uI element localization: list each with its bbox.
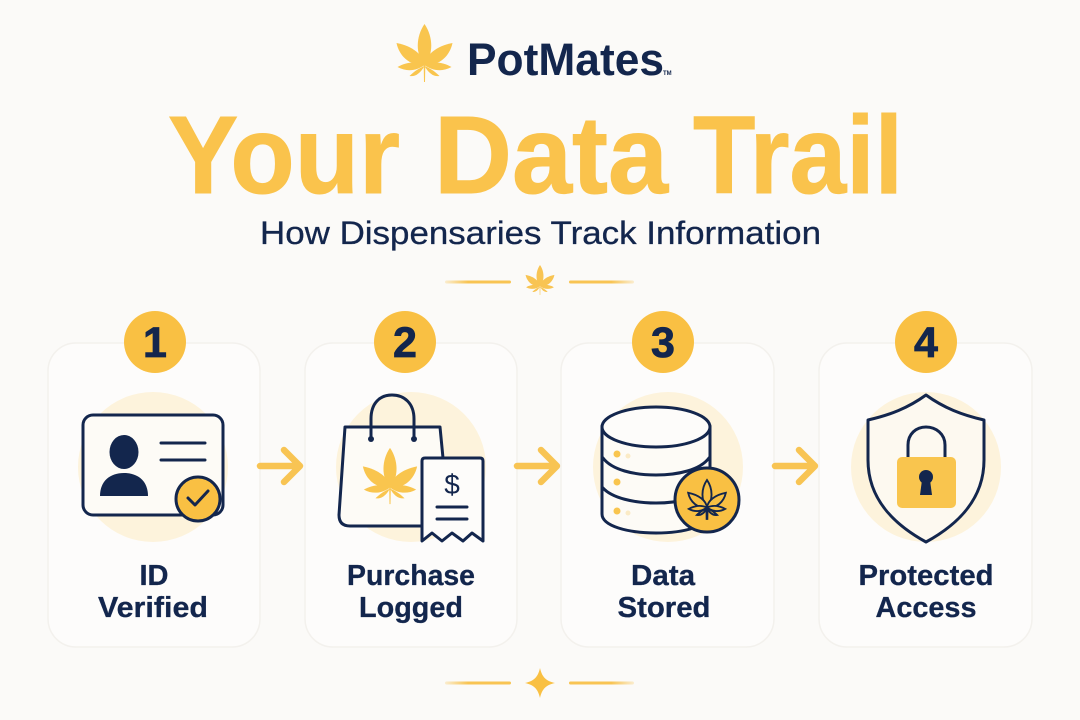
icon: shield and padlock: [851, 392, 1001, 542]
trademark: TM: [663, 71, 672, 77]
panel: step 2 Purchase Logged: [305, 311, 517, 647]
bottom divider: [445, 668, 634, 698]
label: ID: [140, 560, 168, 592]
step number 3: [632, 311, 694, 373]
title: Data: [434, 94, 669, 217]
icon: bag leaf: [363, 448, 417, 504]
arrow 1 to 2: [260, 450, 300, 482]
icon: logo leaf: [396, 24, 452, 82]
card: [48, 343, 260, 647]
panel: step 3 Data Stored: [561, 311, 774, 647]
arrow 2 to 3: [517, 450, 557, 482]
card: [561, 343, 774, 647]
step number 2: 2: [393, 319, 417, 367]
label: Protected: [858, 560, 994, 592]
label: Logged: [359, 592, 463, 624]
step number 2: [374, 311, 436, 373]
label: [98, 560, 208, 624]
top divider: [445, 265, 634, 295]
brand name: PotMates: [467, 34, 664, 85]
label: Purchase: [347, 560, 475, 592]
title: Trail: [693, 94, 903, 217]
icon: shopping bag and receipt: [336, 392, 486, 542]
icon: database: [593, 392, 743, 542]
title: Your: [168, 94, 400, 217]
step number 1: [124, 311, 186, 373]
label: Data: [631, 560, 696, 592]
label: Verified: [98, 592, 208, 624]
panel: step 4 Protected Access: [819, 311, 1032, 647]
label: Stored: [618, 592, 710, 624]
icon: shopping bag and receipt: $: [444, 469, 460, 500]
icon: divider leaf: [526, 265, 554, 295]
step number 3: 3: [651, 319, 675, 367]
card: [305, 343, 517, 647]
subtitle: How Dispensaries Track Information: [260, 215, 821, 251]
icon: ID card: [78, 392, 228, 542]
step number 4: 4: [914, 319, 938, 367]
label: [347, 560, 475, 624]
card: [819, 343, 1032, 647]
arrow 3 to 4: [775, 450, 815, 482]
icon: sparkle: [525, 668, 555, 698]
label: [618, 560, 710, 624]
label: [858, 560, 994, 624]
step number 1: 1: [143, 319, 167, 367]
receipt: [422, 458, 483, 541]
logo: PotMates: [396, 24, 672, 85]
title: [168, 94, 903, 217]
panel: step 1 ID Verified: [48, 311, 260, 647]
step number 4: [895, 311, 957, 373]
label: Access: [876, 592, 976, 624]
icon: badge leaf: [688, 480, 726, 519]
